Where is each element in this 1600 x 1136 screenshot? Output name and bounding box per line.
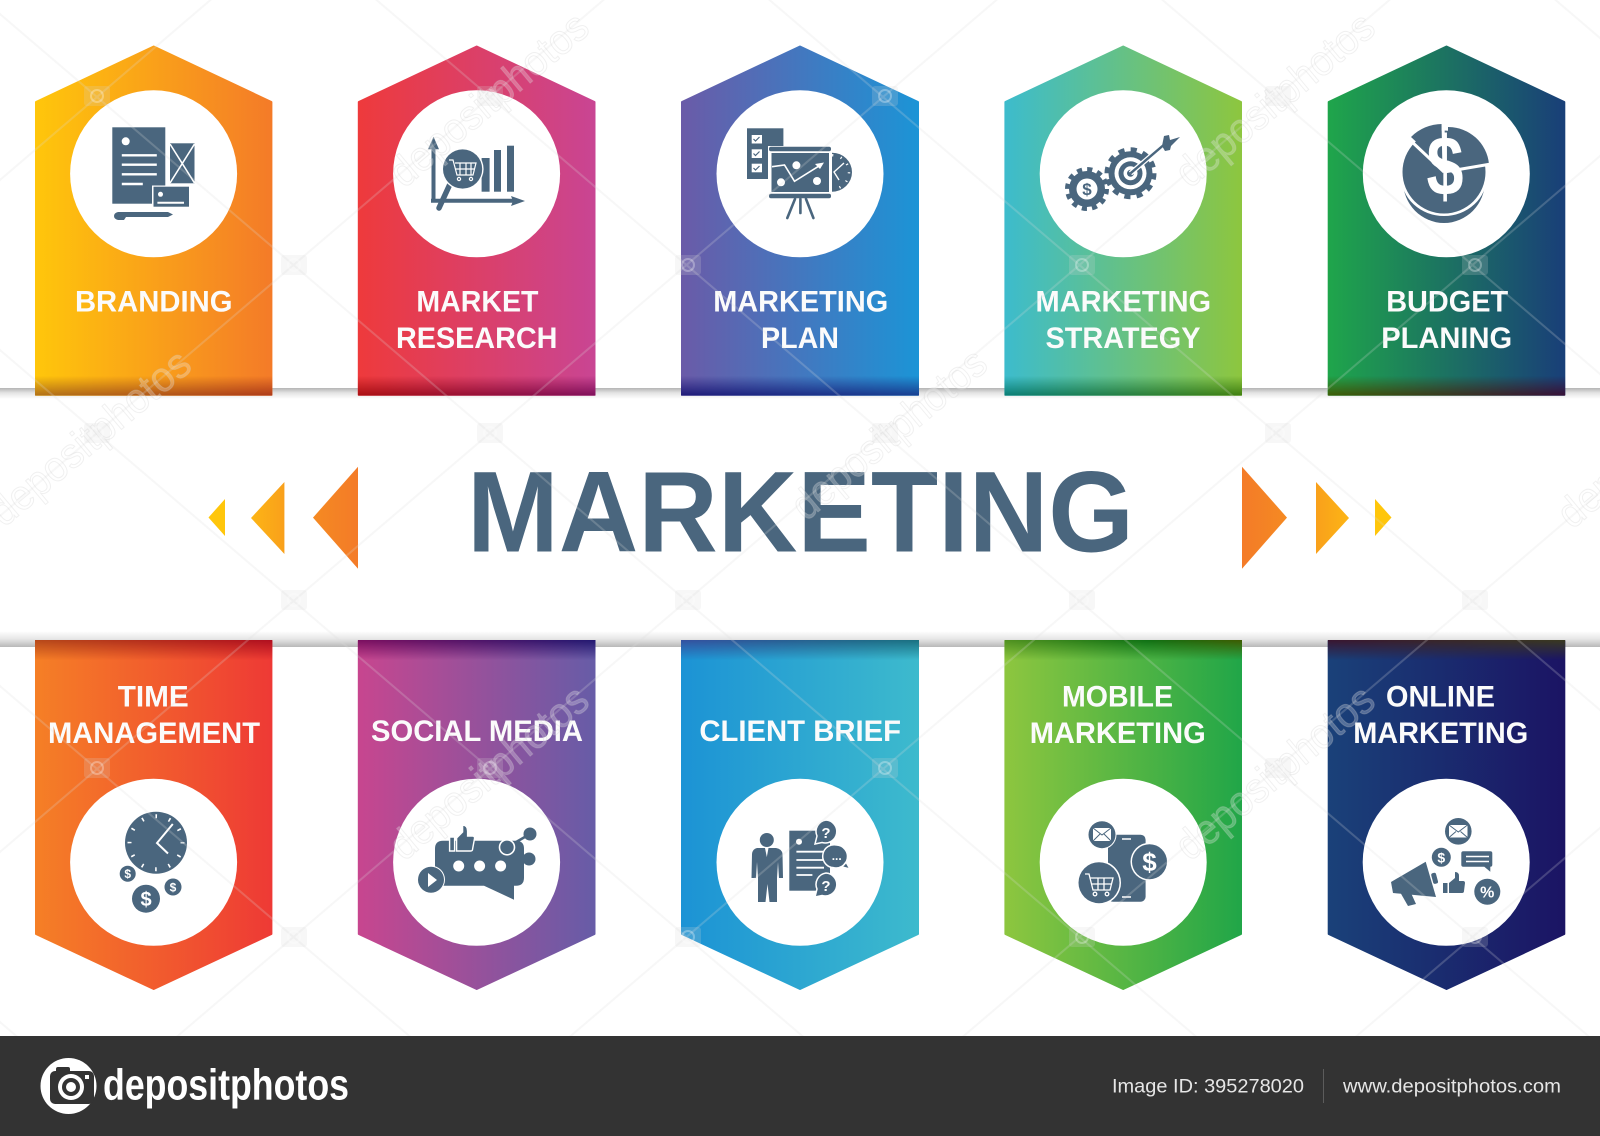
watermark layer: depositphotos	[782, 339, 996, 529]
panel shape	[36, 641, 271, 989]
panel shape	[359, 641, 594, 989]
icon circle	[70, 779, 237, 946]
icon circle	[393, 90, 560, 257]
panel shape	[1329, 641, 1564, 989]
icon: gears and target: $	[1082, 180, 1092, 199]
icon: person with brief: ?	[821, 878, 831, 895]
icon: mobile commerce: $	[1142, 847, 1157, 877]
icon: stationery	[112, 127, 194, 220]
icon circle	[716, 90, 884, 257]
panel: Marketing Plan	[681, 46, 919, 396]
icon circle	[393, 779, 560, 946]
panel: Market Research	[358, 46, 596, 396]
icon: clock and coins	[120, 812, 187, 913]
icon circle	[1040, 90, 1207, 257]
panel shape	[682, 46, 918, 395]
title: MARKETING	[467, 449, 1134, 577]
panel: Market Research: RESEARCH	[396, 322, 557, 355]
label: MARKET	[416, 286, 538, 318]
label: ONLINE	[1386, 680, 1495, 714]
icon: person with brief: ...	[832, 849, 842, 863]
panel shape	[36, 46, 271, 395]
panel: Online Marketing	[1328, 640, 1565, 989]
icon: gears and target	[1068, 135, 1180, 208]
watermark layer: depositphotos	[380, 675, 597, 869]
panel: Marketing Strategy	[1004, 46, 1242, 396]
panel top shadow	[1328, 640, 1565, 660]
panel shape	[1329, 46, 1564, 395]
icon: person with brief	[752, 820, 850, 902]
icon circle	[70, 90, 237, 257]
logo wordmark: depositphotos	[103, 1060, 349, 1109]
icon: social chat	[417, 825, 536, 900]
image id: Image ID: 395278020	[1112, 1076, 1304, 1098]
panel bottom shadow	[358, 376, 596, 396]
label: BUDGET	[1386, 286, 1508, 318]
icon: camera logo	[40, 1058, 96, 1114]
panel: Budget Planing	[1328, 46, 1565, 396]
panel: Time Management	[35, 640, 272, 989]
panel: Marketing Plan: PLAN	[761, 322, 839, 355]
panel top shadow	[35, 640, 272, 658]
icon: online promotion	[1391, 818, 1500, 906]
icon: dollar pie chart	[1401, 119, 1491, 223]
label: BRANDING	[75, 286, 232, 318]
icon circle	[1363, 90, 1530, 257]
panel: Budget Planing: PLANING	[1381, 322, 1512, 355]
label: MARKETING	[1036, 286, 1211, 318]
label: TIME	[118, 680, 189, 714]
label: MARKETING	[713, 286, 888, 318]
panel shape	[1005, 46, 1241, 395]
label: MOBILE	[1062, 680, 1173, 714]
icon: mobile commerce	[1077, 820, 1168, 905]
panel bottom shadow	[1004, 376, 1242, 396]
icon: clock and coins: $	[140, 889, 152, 911]
icon circle	[1040, 779, 1207, 946]
footer bar	[0, 1036, 1600, 1136]
icon: online promotion: $	[1437, 850, 1445, 866]
panel shape	[1005, 641, 1241, 989]
panel: Mobile Marketing: MARKETING	[1030, 717, 1206, 750]
arrows: left	[208, 467, 358, 569]
icon: presentation plan	[747, 128, 852, 218]
arrows: right	[1242, 467, 1392, 569]
panel bottom shadow	[35, 376, 272, 396]
label: CLIENT BRIEF	[699, 715, 901, 748]
icon: clock and coins: $	[124, 867, 131, 881]
panel: Social Media	[358, 640, 596, 989]
panel shape	[359, 46, 594, 395]
panel: Marketing Strategy: STRATEGY	[1046, 322, 1200, 355]
icon: clock and coins: $	[170, 880, 177, 894]
panel shape	[682, 641, 918, 989]
panel bottom shadow	[1328, 376, 1565, 396]
panel: Mobile Marketing	[1004, 640, 1242, 989]
panel top shadow	[681, 640, 919, 660]
panel bottom shadow	[681, 376, 919, 396]
icon: online promotion: %	[1480, 884, 1494, 902]
icon circle	[1363, 779, 1530, 946]
icon: dollar pie chart: $	[1426, 119, 1464, 213]
panel: Branding	[35, 46, 272, 396]
website: www.depositphotos.com	[1342, 1076, 1561, 1098]
panel: Time Management: MANAGEMENT	[48, 717, 260, 750]
panel top shadow	[358, 640, 596, 660]
panel: Online Marketing: MARKETING	[1353, 717, 1528, 750]
icon circle	[716, 779, 884, 946]
icon: market chart with magnifier	[428, 137, 525, 208]
label: SOCIAL MEDIA	[371, 715, 583, 748]
panel top shadow	[1004, 640, 1242, 658]
icon: person with brief: ?	[821, 825, 831, 842]
panel: Client Brief	[681, 640, 919, 989]
watermark layer: depositphotos	[1166, 675, 1383, 869]
